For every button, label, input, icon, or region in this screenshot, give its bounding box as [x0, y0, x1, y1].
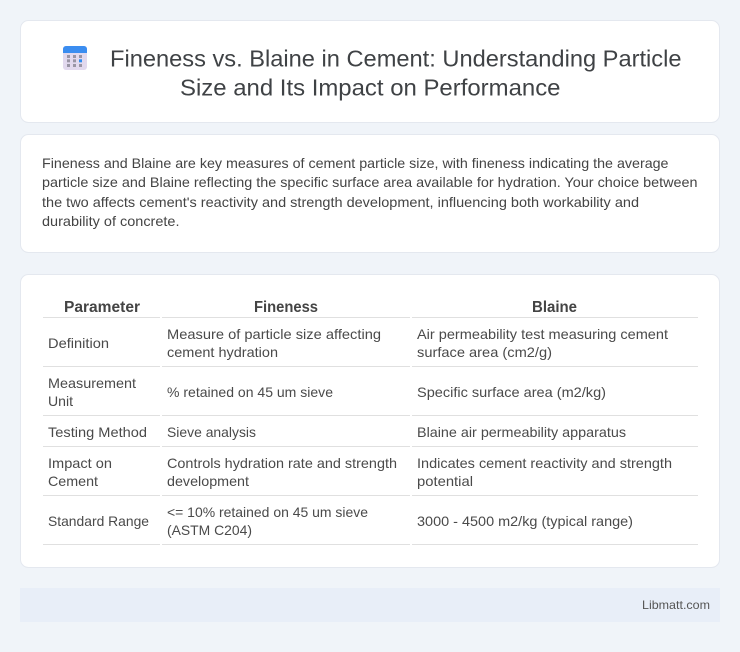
intro paragraph: [42, 155, 698, 229]
intro paragraph: the two affects cement's reactivity and strength development, influencing both workability and: [42, 194, 639, 210]
row: impact on cement: Indicates cement reactivity and strength: [417, 456, 672, 471]
row: testing method: Blaine air permeability apparatus: [417, 425, 626, 440]
title: [110, 46, 682, 100]
row: impact on cement: Cement: [48, 474, 98, 489]
row: definition: cement hydration: [167, 345, 278, 360]
footer credit: Libmatt.com: [642, 598, 710, 612]
row: definition: [43, 327, 698, 367]
title: Fineness vs. Blaine in Cement: Understanding Particle: [110, 46, 682, 72]
panel: introduction: [20, 134, 720, 252]
footer: [20, 588, 720, 622]
row: impact on cement: [43, 456, 698, 496]
row: testing method: [43, 425, 698, 447]
row: measurement unit: % retained on 45 um sieve: [167, 385, 333, 400]
row: measurement unit: Measurement: [48, 376, 136, 391]
panel: comparison table: [20, 274, 720, 568]
row: impact on cement: development: [167, 474, 249, 489]
row: testing method: Testing Method: [48, 425, 147, 440]
row: definition: surface area (cm2/g): [417, 345, 552, 360]
row: measurement unit: Unit: [48, 394, 73, 409]
row: standard range: 3000 - 4500 m2/kg (typical range): [417, 514, 633, 529]
icon: calendar: [63, 46, 87, 70]
row: standard range: (ASTM C204): [167, 523, 252, 538]
row: standard range: [43, 505, 698, 545]
table header: Fineness: [254, 299, 318, 316]
row: definition: Air permeability test measuring cement: [417, 327, 668, 342]
intro paragraph: particle size and Blaine reflecting the specific surface area available for hydration. Your choice between: [42, 174, 698, 190]
row: definition: Measure of particle size affecting: [167, 327, 381, 342]
row: standard range: <= 10% retained on 45 um sieve: [167, 505, 368, 520]
intro paragraph: Fineness and Blaine are key measures of cement particle size, with fineness indicating the average: [42, 155, 669, 171]
row: testing method: Sieve analysis: [167, 425, 256, 440]
row: standard range: Standard Range: [48, 514, 149, 529]
table header: [43, 299, 698, 318]
row: definition: Definition: [48, 336, 109, 351]
table header: Blaine: [532, 299, 577, 316]
row: impact on cement: Controls hydration rate and strength: [167, 456, 397, 471]
intro paragraph: durability of concrete.: [42, 213, 180, 229]
row: impact on cement: Impact on: [48, 456, 112, 471]
title: Size and Its Impact on Performance: [180, 74, 560, 100]
row: measurement unit: [43, 376, 698, 416]
table header: Parameter: [64, 299, 140, 316]
panel: header: [20, 20, 720, 122]
row: impact on cement: potential: [417, 474, 473, 489]
row: measurement unit: Specific surface area (m2/kg): [417, 385, 606, 400]
